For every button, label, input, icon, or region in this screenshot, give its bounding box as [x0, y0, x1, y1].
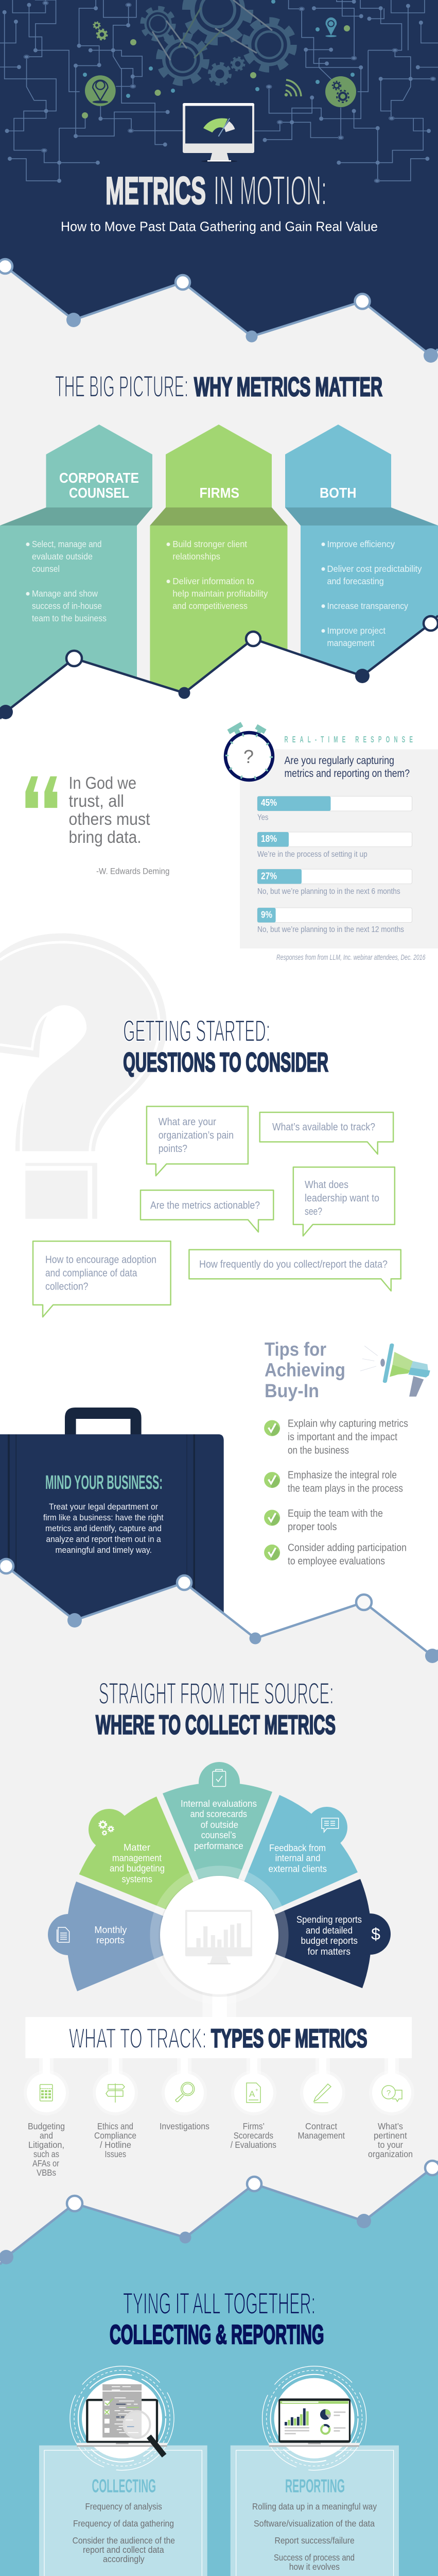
zigzag band: where to collect [0, 1560, 438, 2267]
metric type: budgeting and litigation: AFAs or [32, 2158, 59, 2168]
label: REAL-TIME RESPONSE [284, 735, 413, 745]
metric type: investigations: Investigations [160, 2121, 209, 2131]
sector: feedback [239, 1795, 358, 1912]
bubble: frequency: How frequently do you collect/report the data? [199, 1259, 388, 1270]
suitcase body text: firm like a business: have the right [43, 1513, 164, 1522]
metric type: contract management: Contract [305, 2121, 337, 2131]
sector: spending reports: budget reports [301, 1935, 358, 1946]
tips heading [265, 1338, 345, 1401]
panel: firms: help maintain profitability [172, 588, 268, 599]
panel: corporate counsel: success of in-house [32, 601, 102, 611]
icon: speech bubble [322, 1818, 339, 1832]
icon: green gears badge [325, 76, 356, 107]
line chart divider 1 [0, 259, 438, 363]
tips heading: Tips for [265, 1338, 326, 1360]
sector: feedback: internal and [275, 1853, 320, 1863]
panel: firms [150, 425, 287, 719]
quote attribution: -W. Edwards Deming [96, 867, 169, 876]
panel: mind your business suitcase [0, 1408, 224, 1649]
quote text: trust, all [69, 791, 124, 810]
sector: spending reports [268, 1879, 391, 1988]
bubble: adoption [33, 1241, 171, 1317]
bubble: leadership: leadership want to [305, 1193, 379, 1204]
heading: getting started: GETTING STARTED: [123, 1014, 270, 1048]
metric type: investigations [160, 2058, 209, 2131]
reporting list: Success of process and [274, 2552, 355, 2563]
bubble: leadership: see? [305, 1206, 322, 1217]
icon: pencil [314, 2084, 331, 2103]
sector: internal evaluations [163, 1762, 272, 1887]
bar: 9%: 9% [261, 910, 272, 920]
metric type: budgeting and litigation: such as [33, 2149, 59, 2159]
heading: big picture: THE BIG PICTURE: [55, 370, 188, 403]
centre hub [150, 1866, 289, 2005]
gauge [203, 118, 235, 137]
panel: both: and forecasting [327, 576, 384, 586]
collecting list: report and collect data [83, 2545, 164, 2555]
icon: signpost [106, 2083, 125, 2103]
metric type: budgeting and litigation: VBBs [37, 2167, 56, 2178]
suitcase body text: analyze and report them out in a [46, 1534, 161, 1544]
bar: 9% [257, 908, 412, 934]
line chart divider 3 [0, 1559, 438, 1663]
sector: feedback: Feedback from [269, 1842, 326, 1853]
collecting list: Frequency of data gathering [73, 2518, 174, 2529]
bar: 27%: No, but we’re planning to in the next 6 months [257, 887, 400, 896]
panel: corporate counsel: CORPORATE [59, 470, 139, 486]
zigzag band: blue section [0, 2161, 438, 2576]
metric type: ethics and compliance: Issues [105, 2149, 126, 2159]
tip 2: Emphasize the integral role [288, 1469, 397, 1481]
illustration: laptop with dashboard [262, 2366, 366, 2470]
heading: tying it all together [110, 2287, 324, 2350]
panel: firms: Build stronger client [172, 539, 247, 549]
metric type: budgeting and litigation: and [40, 2130, 53, 2141]
heading: straight from the source [96, 1677, 336, 1740]
icon: gears [99, 1821, 114, 1835]
panel: real-time response 1 [225, 722, 438, 948]
panel: corporate counsel: evaluate outside [32, 551, 93, 562]
collecting list: Frequency of analysis [85, 2501, 162, 2512]
sector: monthly reports [48, 1882, 170, 1991]
reporting list: Software/visualization of the data [254, 2518, 375, 2529]
icon: quote marks [25, 776, 57, 808]
collecting list [73, 2501, 175, 2564]
sector: internal evaluations: of outside [201, 1819, 238, 1830]
bubble: adoption: and compliance of data [45, 1268, 137, 1279]
panel: firms: FIRMS [200, 485, 239, 501]
tip 1: is important and the impact [288, 1432, 397, 1443]
metric type: firms scorecards [231, 2058, 276, 2150]
question bubbles [33, 1106, 401, 1317]
title: METRICS [106, 169, 206, 212]
panel: corporate counsel: team to the business [32, 613, 107, 623]
sector: monthly reports: Monthly [94, 1924, 127, 1935]
sector: internal evaluations: performance [194, 1840, 243, 1851]
metric type: pertinent to organization: organization [368, 2149, 413, 2159]
panel: both [285, 425, 438, 719]
sector: matter management: Matter [124, 1842, 150, 1853]
metric type: pertinent to organization: pertinent [374, 2130, 407, 2141]
quote text [69, 773, 150, 846]
sector: spending reports: for matters [308, 1946, 351, 1957]
panel: both: management [327, 638, 375, 648]
pull quote [25, 773, 169, 876]
reporting list: Report success/failure [275, 2535, 355, 2546]
panel: corporate counsel: counsel [32, 564, 60, 574]
bubble: available to track [260, 1112, 393, 1154]
panel: firms: Deliver information to [172, 576, 254, 586]
sector: spending reports: Spending reports [296, 1914, 362, 1925]
stopwatch icon [225, 722, 273, 780]
line chart divider 4 [0, 2161, 438, 2264]
sector: spending reports: and detailed [306, 1925, 353, 1936]
bar: 18% [257, 832, 412, 859]
panel: corporate counsel: Manage and show [32, 588, 98, 599]
metric type: budgeting and litigation [24, 2058, 69, 2178]
sector: matter management [79, 1797, 198, 1911]
suitcase body text [43, 1502, 164, 1555]
sector: feedback: external clients [269, 1863, 327, 1874]
sector: internal evaluations: counsel’s [201, 1829, 236, 1840]
metric type: pertinent to organization: ? [387, 2089, 391, 2097]
metric type: contract management: Management [297, 2130, 345, 2141]
panel: corporate counsel: Select, manage and [32, 539, 102, 549]
tip 1: Explain why capturing metrics [288, 1418, 408, 1430]
metric type: ethics and compliance: / Hotline [100, 2140, 131, 2150]
tip 1 [264, 1418, 408, 1456]
sector: internal evaluations: Internal evaluations [181, 1798, 257, 1809]
icon: calculator [40, 2084, 52, 2101]
bar: 9%: No, but we’re planning to in the next 12 months [257, 925, 404, 934]
icon: document [57, 1927, 69, 1942]
suitcase body text: Treat your legal department or [49, 1502, 158, 1512]
metric type: firms scorecards: Scorecards [234, 2130, 273, 2141]
stopwatch icon: ? [243, 746, 254, 767]
metric type: pertinent to organization: What’s [378, 2121, 403, 2131]
circuit board artwork [0, 0, 438, 181]
icon: question bubbles [382, 2086, 402, 2102]
centre connector stem [203, 1989, 236, 2017]
tip 3: proper tools [288, 1521, 337, 1533]
metric type: budgeting and litigation: Litigation, [28, 2140, 64, 2150]
panel: firms: and competitiveness [172, 601, 248, 611]
bar: 27% [257, 869, 412, 896]
bubble: adoption: collection? [45, 1281, 89, 1293]
tips heading: Achieving [265, 1360, 345, 1381]
panel: both: BOTH [320, 485, 356, 501]
sector: matter management: systems [122, 1874, 152, 1885]
bubble: pain points [147, 1106, 248, 1176]
line chart divider 2 [0, 616, 438, 719]
panel: corporate counsel: COUNSEL [69, 485, 129, 501]
metric type: budgeting and litigation: Budgeting [28, 2121, 65, 2131]
quote text: bring data. [69, 827, 141, 846]
panel: both: Improve project [327, 625, 386, 636]
bubble: available to track: What’s available to track? [272, 1122, 375, 1133]
collecting heading: COLLECTING [92, 2475, 156, 2497]
icon: green map pin [85, 75, 116, 106]
tips heading: Buy-In [265, 1380, 319, 1401]
panel: both: Improve efficiency [327, 539, 395, 549]
monitor with gauge [183, 103, 254, 162]
heading band: what to track: WHAT TO TRACK: [69, 2022, 207, 2054]
suitcase heading: MIND YOUR BUSINESS: [45, 1472, 163, 1494]
illustration: laptop with checklist [70, 2366, 174, 2470]
panel: firms: relationships [172, 551, 220, 562]
icon: dollar: $ [371, 1925, 380, 1943]
panel: both: Increase transparency [327, 601, 408, 611]
question: metrics and reporting on them? [284, 768, 410, 779]
bubble: pain points: What are your [159, 1116, 216, 1128]
bar: 18%: We’re in the process of setting it up [257, 850, 367, 859]
bar: 45% [257, 796, 412, 822]
gears illustration [143, 0, 293, 84]
reporting heading: REPORTING [285, 2475, 345, 2497]
tip 2 [264, 1469, 403, 1494]
panel: corporate counsel [0, 425, 152, 719]
icon: megaphone [360, 1345, 430, 1397]
sector: matter management: management [112, 1853, 162, 1863]
sector: internal evaluations: and scorecards [190, 1808, 247, 1819]
icon: blue map pin [325, 18, 337, 37]
metric type: ethics and compliance: Compliance [94, 2130, 136, 2141]
bubble: pain points: organization’s pain [159, 1130, 234, 1141]
bar: 45%: Yes [257, 813, 269, 822]
bubble: actionable: Are the metrics actionable? [150, 1200, 260, 1211]
suitcase body text: meaningful and timely way. [56, 1545, 152, 1555]
metric type: firms scorecards: / Evaluations [231, 2140, 276, 2150]
title: IN MOTION: [214, 167, 327, 213]
metric type: firms scorecards: A [249, 2089, 255, 2099]
sector: matter management: and budgeting [110, 1863, 165, 1873]
metric type: contract management [297, 2058, 345, 2141]
icon: monitor chart [185, 1910, 252, 1964]
bubble: leadership [293, 1167, 395, 1236]
bubble: adoption: How to encourage adoption [45, 1255, 156, 1266]
tip 3: Equip the team with the [288, 1508, 383, 1519]
bar: 45%: 45% [261, 798, 277, 808]
metric type: pertinent to organization: to your [378, 2140, 403, 2150]
icon: graded paper [247, 2083, 260, 2103]
bubble: actionable [141, 1190, 273, 1232]
question: Are you regularly capturing [284, 755, 394, 767]
metric type: firms scorecards: Firms’ [243, 2121, 265, 2131]
small green gears [93, 22, 107, 40]
large question mark background [0, 933, 167, 1219]
sector: monthly reports: reports [96, 1935, 125, 1945]
icon: clipboard [213, 1769, 225, 1787]
card: collecting [39, 2366, 207, 2576]
tip 1: on the business [288, 1445, 349, 1456]
heading band: what to track [25, 2017, 412, 2058]
bubble: leadership: What does [305, 1179, 348, 1191]
reporting list [252, 2501, 377, 2572]
suitcase body [0, 1434, 224, 1649]
panel: tips for buy-in [264, 1338, 430, 1567]
card: reporting [231, 2366, 399, 2576]
question [284, 755, 410, 779]
bar: 27%: 27% [261, 871, 277, 881]
metric type: firms scorecards: + [255, 2088, 258, 2093]
reporting list: Rolling data up in a meaningful way [252, 2501, 377, 2512]
bubble: pain points: points? [159, 1143, 187, 1155]
metric type: pertinent to organization [368, 2058, 414, 2159]
icon: wifi signal [285, 80, 301, 96]
metric type: ethics and compliance [93, 2058, 138, 2159]
reporting list: how it evolves [289, 2562, 340, 2572]
bubble: frequency [189, 1250, 401, 1291]
suitcase handle [65, 1408, 142, 1434]
bar: 18%: 18% [261, 834, 277, 844]
quote text: In God we [69, 773, 136, 792]
collecting list: Consider the audience of the [73, 2535, 175, 2546]
panel: both: Deliver cost predictability [327, 564, 422, 574]
heading: getting started [123, 1014, 328, 1078]
zigzag band: white section [0, 616, 438, 1664]
tip 2: the team plays in the process [288, 1483, 403, 1494]
zigzag band: hero to big picture [0, 266, 438, 721]
icon: magnifier [176, 2082, 195, 2102]
decorative dots [82, 0, 355, 118]
radial diagram: metric sources [48, 1762, 391, 2017]
collecting list: accordingly [103, 2554, 145, 2564]
hero banner [0, 0, 438, 371]
metric type: ethics and compliance: Ethics and [97, 2121, 133, 2131]
tip 3 [264, 1508, 383, 1533]
subtitle: How to Move Past Data Gathering and Gain Real Value [61, 218, 378, 234]
tip 4: to employee evaluations [288, 1556, 385, 1567]
suitcase body text: metrics and identify, capture and [45, 1523, 162, 1533]
tip 4: Consider adding participation [288, 1543, 407, 1554]
quote text: others must [69, 809, 150, 828]
tip 4 [264, 1543, 407, 1567]
